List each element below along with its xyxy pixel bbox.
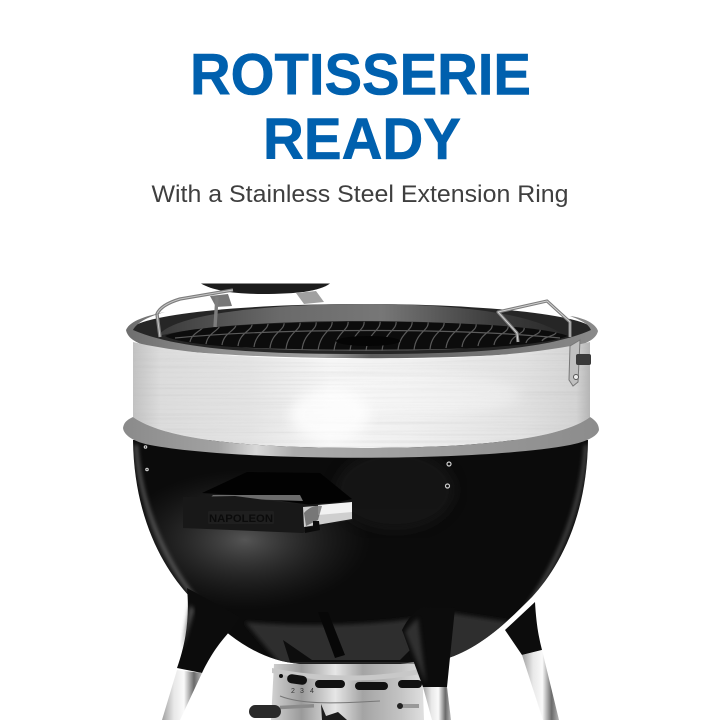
center base with vents [271,664,424,720]
bowl rivets [144,446,451,488]
left grate handle [157,290,233,337]
side handle [183,472,353,533]
title: ROTISSERIE [190,42,531,108]
title [190,42,531,172]
black leg left [162,588,240,720]
base lever [249,704,347,720]
black leg right [505,602,559,720]
center base with vents: 3 [300,688,304,695]
grill illustration [120,284,599,720]
upper ring rim [126,312,598,358]
title: READY [263,107,461,172]
center base with vents: 2 [291,688,295,695]
right grate handle [498,301,570,342]
grill interior and grate [130,304,594,358]
black leg middle [402,607,455,720]
side handle: NAPOLEON [209,513,273,525]
ring latch [569,340,591,386]
center base with vents: 4 [310,688,314,695]
bowl [120,440,588,666]
lid peeking behind the ring [201,284,330,307]
stainless steel extension ring [133,340,590,450]
subtitle: With a Stainless Steel Extension Ring [152,181,568,208]
lower ring rim [123,417,599,458]
